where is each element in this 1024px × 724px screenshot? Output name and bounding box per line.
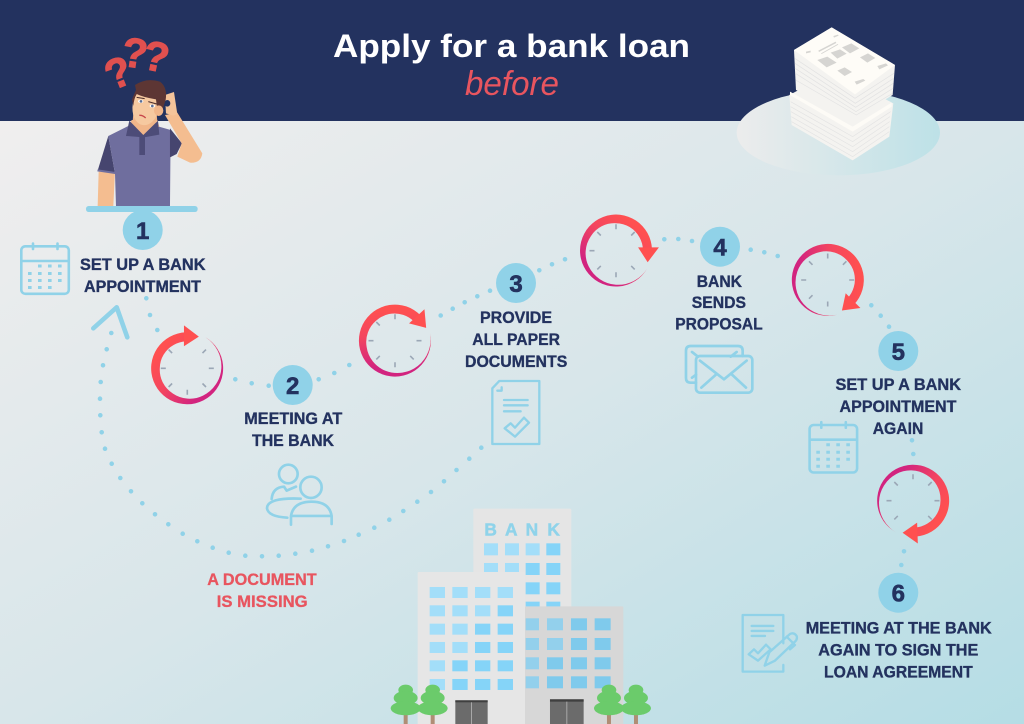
- icon: calendar again: [810, 422, 857, 472]
- dotted path: clock to 5: [871, 305, 889, 327]
- icon: meeting: [267, 465, 332, 525]
- step 2 number: 2: [286, 373, 299, 400]
- bank sign: BANK: [484, 520, 560, 540]
- step 1 number: 1: [136, 218, 149, 245]
- dotted path: 2 to clock: [319, 365, 349, 379]
- illustration: paper stack: [737, 27, 940, 175]
- step 3 label: DOCUMENTS: [465, 352, 567, 371]
- dotted path: 3 to clock: [539, 259, 565, 270]
- dotted path: clock to 4: [664, 239, 692, 241]
- step 1 number: [123, 210, 163, 250]
- icon: signed agreement: [743, 615, 797, 672]
- step 6 number: [878, 573, 918, 613]
- step 4 number: 4: [713, 235, 727, 262]
- step 4 number: [700, 227, 740, 267]
- step 6 label: [806, 618, 992, 681]
- step 3 number: [496, 263, 536, 303]
- step 5 label: APPOINTMENT: [840, 397, 957, 416]
- doors: [455, 699, 584, 724]
- step 5 label: AGAIN: [873, 419, 923, 438]
- step 6 label: LOAN AGREEMENT: [824, 662, 973, 681]
- step 5 number: 5: [892, 339, 905, 366]
- dotted path: clock to 2: [235, 379, 269, 386]
- step 3 label: PROVIDE: [480, 308, 552, 327]
- step 3 label: [465, 308, 567, 371]
- clock 4: [780, 232, 877, 331]
- step 4 label: PROPOSAL: [675, 314, 763, 334]
- platform: [86, 206, 198, 212]
- dotted path: 4 to clock: [751, 250, 778, 256]
- callout: a document is missing: A DOCUMENT: [207, 570, 317, 589]
- illustration: bank building: [391, 509, 651, 724]
- clock 5: [867, 455, 959, 549]
- step 3 number: 3: [509, 271, 523, 298]
- step 5 label: [836, 375, 962, 438]
- icon: calendar: [21, 244, 69, 294]
- icon: envelopes: [686, 346, 752, 393]
- step 4 label: BANK: [697, 272, 743, 291]
- step 6 label: AGAIN TO SIGN THE: [818, 640, 978, 659]
- step 1 label: [80, 255, 206, 296]
- question marks: [98, 28, 174, 99]
- step 1 label: APPOINTMENT: [84, 277, 202, 296]
- icon: document: [492, 381, 539, 444]
- clock 2: [348, 292, 445, 388]
- clock 3: [570, 204, 665, 298]
- dotted loop back to step 1: [100, 333, 481, 556]
- dotted path: 1 to clock: [146, 298, 157, 330]
- dotted path: 5 to clock: [912, 440, 913, 454]
- dotted path: clock to 3: [441, 291, 490, 316]
- question marks: ?: [139, 31, 174, 82]
- header band: [0, 0, 1024, 121]
- subtitle: before: [465, 65, 559, 103]
- step 2 label: [244, 409, 343, 450]
- step 5 label: SET UP A BANK: [836, 375, 962, 394]
- step 3 label: ALL PAPER: [472, 330, 560, 349]
- title: Apply for a bank loan: [333, 28, 690, 64]
- step 2 number: [273, 365, 313, 405]
- callout: a document is missing: IS MISSING: [217, 592, 308, 611]
- callout: a document is missing: [207, 570, 317, 611]
- question marks: ?: [98, 46, 139, 99]
- clock 1: [141, 319, 234, 414]
- step 4 label: SENDS: [692, 293, 746, 312]
- step 4 label: [675, 272, 763, 334]
- step 2 label: THE BANK: [252, 431, 335, 450]
- step 5 number: [878, 331, 918, 371]
- trees: [391, 685, 651, 724]
- step 1 label: SET UP A BANK: [80, 255, 206, 274]
- arrow: loop head: [93, 307, 127, 337]
- step 6 label: MEETING AT THE BANK: [806, 618, 992, 637]
- illustration: puzzled man: [86, 28, 202, 212]
- question marks: ?: [119, 28, 151, 78]
- step 2 label: MEETING AT: [244, 409, 343, 428]
- step 6 number: 6: [892, 581, 905, 608]
- dotted path: clock to 6: [901, 551, 904, 565]
